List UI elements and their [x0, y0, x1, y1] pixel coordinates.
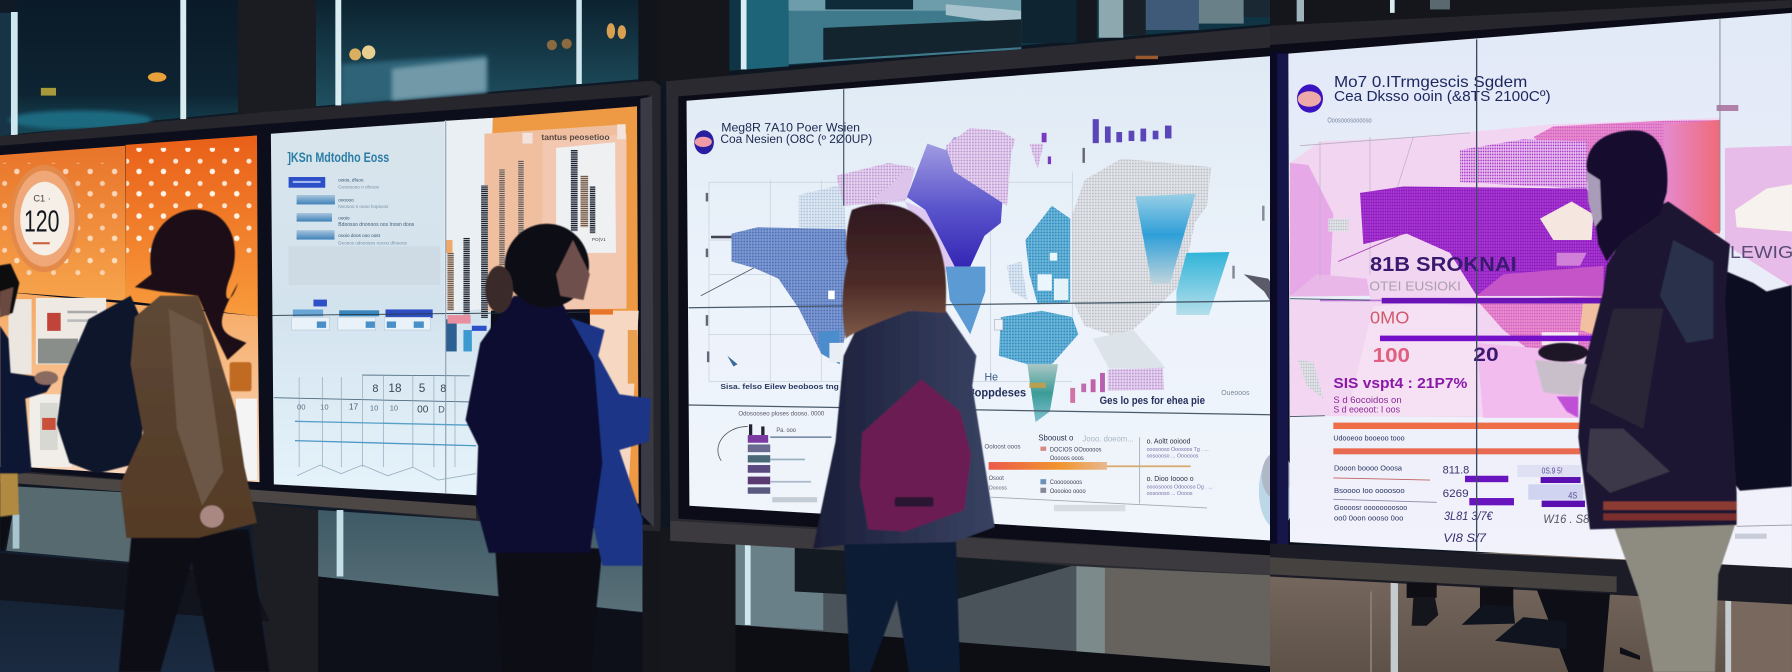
map: europe and africa: [995, 206, 1078, 422]
right section floor and top band: [1270, 0, 1792, 672]
navy coat: [466, 296, 602, 553]
grid: [701, 148, 1265, 381]
lower-right stats: DOCIOS OOooooos: [1050, 447, 1102, 453]
map captions: ᵗoppdeses: [972, 387, 1026, 400]
right edge map portion: LEWIG: [1730, 242, 1792, 262]
held tablet and hand: [1535, 360, 1587, 396]
lower-right stats: o. Aoltt ooiood: [1147, 437, 1191, 446]
map captions: Sisa. felso Eilew beoboos tng: [720, 382, 839, 391]
title: Ooosooosooooso: [1327, 117, 1372, 125]
map captions: He: [985, 371, 998, 384]
lower data table: VI8 S/7: [1443, 533, 1488, 546]
lower-right stats: [985, 433, 1213, 511]
lower data table: Dooon boooo Ooosa: [1334, 465, 1402, 473]
lower-right stats: oosoooso ... Oooos: [1147, 491, 1193, 497]
map captions: Ges lo pes for ehea pie: [1100, 396, 1205, 407]
key figures: OTEI EUSIOKI: [1369, 281, 1461, 294]
small column blocks and grid: [272, 120, 590, 493]
lower-right stats: Ooooss: [989, 485, 1007, 492]
key figures: S d 6ocoidos on: [1333, 395, 1402, 405]
lower-right stats: oooosooos Odoooso Dg . ...: [1147, 485, 1213, 491]
bar chart: pink columns and dots: [1070, 368, 1164, 403]
person: man with backpack on right: [1535, 130, 1792, 672]
bar chart: purple columns: [1093, 119, 1171, 143]
key figures: 81B SROKNAI: [1370, 252, 1517, 275]
blue jacket sleeve: [556, 313, 651, 566]
vertical hatched bars: PO(V1: [592, 237, 606, 242]
dot field: [0, 163, 122, 279]
lower-left data list: Pa. ooo: [776, 428, 796, 434]
jacket: [1578, 201, 1737, 529]
lower data table: 811.8: [1443, 465, 1469, 477]
person: woman with magenta backpack: [813, 204, 995, 672]
key figures: 0MO: [1370, 308, 1409, 328]
right edge map portion: [1717, 105, 1792, 287]
lower-right stats: oosoooso ... Oooooos: [1147, 454, 1199, 460]
lower-right stats: Coooooooos: [1050, 480, 1082, 486]
hair: [843, 204, 946, 339]
head: [1587, 130, 1667, 261]
map captions: [720, 371, 1250, 407]
icon: gauge dial with 120: C1 ·: [33, 193, 51, 203]
key figures: 100: [1373, 343, 1410, 367]
right display frame: [1270, 0, 1792, 604]
legs: [119, 529, 270, 672]
lower-left data list: [718, 411, 831, 502]
held phone: [230, 362, 252, 391]
lower data table: Goooosr oooooooosoo: [1334, 504, 1408, 512]
backpack: [57, 296, 152, 474]
small column blocks and grid: 10: [370, 404, 378, 413]
key figures: [1320, 252, 1603, 415]
legend list: Gonoeoeo n ofooos: [338, 185, 380, 190]
person: far left viewer: [0, 264, 58, 551]
map: americas: [727, 184, 852, 366]
small column blocks and grid: 17: [349, 401, 358, 411]
lower-right stats: Ooooioo oooo: [1050, 489, 1086, 495]
key figures: 20: [1473, 343, 1499, 365]
title: [720, 120, 873, 146]
legend list: Bdoosso dnonoos oos Inosn doos: [338, 222, 415, 228]
small column blocks and grid: 5: [419, 381, 426, 395]
coat: [813, 311, 995, 549]
panel: magenta map display: [1288, 13, 1792, 568]
lower data table: Bsoooo Ioo oooosoo: [1334, 487, 1405, 495]
globe shape: [1259, 452, 1296, 528]
heading: ]KSn Mdtodho Eoss: [287, 150, 389, 165]
jeans: [844, 536, 960, 672]
logo badge: [1297, 84, 1323, 113]
lower data table: 6269: [1443, 488, 1469, 501]
lower data table: oo0 0oon oooso 0oo: [1334, 515, 1404, 523]
left section architecture: windows, pillar and floor: [0, 0, 661, 672]
left display frame: [0, 81, 661, 531]
lower data table: Udooeoo booeoo tooo: [1333, 435, 1405, 443]
logo badge: [694, 130, 714, 154]
lower data table: W16 . S8: [1543, 513, 1589, 526]
middle display frame: [666, 24, 1300, 576]
dividers: [689, 89, 1277, 415]
head: [505, 224, 589, 308]
lower-left data list: Odosooseo ploses dooso. 0000: [738, 411, 825, 418]
vertical hatched bars: [446, 124, 626, 351]
map captions: Oueooos: [1221, 389, 1250, 397]
legend list: Neoooo s oooo hopsoos: [338, 204, 389, 209]
lower-right stats: Ooloost ooos: [985, 443, 1021, 450]
title: Coa Nesien (O8C (º 2Ø0UP): [720, 134, 873, 146]
legend list: ooios, dfuoo: [338, 178, 364, 183]
small column blocks and grid: D: [438, 404, 445, 414]
lower-right stats: o. Dioo Ioooo o: [1147, 475, 1194, 483]
map: pink and purple prism: [836, 128, 1051, 334]
middle section architecture: upper window and floor: [660, 0, 1300, 672]
east asia fragment: [1244, 274, 1276, 311]
map: pale ground: [1290, 118, 1720, 418]
magenta backpack: [860, 379, 971, 531]
lower-right stats: Osoot: [989, 476, 1004, 482]
lower data table: 0S.9 5!: [1542, 466, 1563, 476]
info cards: [8, 298, 257, 480]
title: Cea Dksso ooin (&8TS 2100Cº): [1334, 88, 1551, 104]
small column blocks and grid: 18: [388, 381, 402, 395]
lower data table: [1333, 423, 1792, 546]
legend list: oooio: [338, 215, 350, 220]
person: woman in brown coat with backpack: [57, 209, 270, 672]
icon: gauge dial with 120: [10, 165, 79, 272]
dividers: [1290, 19, 1720, 551]
lower-right stats: Sbooust o: [1038, 433, 1074, 443]
legs: [495, 544, 602, 672]
vertical hatched bars: tantus peosetioo: [541, 132, 610, 142]
map: grey region with blue trapezoids: [1072, 159, 1229, 369]
lower-right stats: Jooo. doeom...: [1082, 434, 1134, 444]
lower data table: 3L81 3/7€: [1444, 511, 1494, 523]
person: background feet: [1407, 583, 1640, 672]
key figures: S d eoeoot: I oos: [1333, 405, 1400, 415]
panel: orange gauge display: [0, 135, 260, 482]
small column blocks and grid: 00: [417, 404, 429, 415]
panel: world map display: [687, 56, 1296, 541]
title: Mo7 0.ITrmgescis Sgdem: [1334, 72, 1527, 90]
title: Meg8R 7A10 Poer Wsien: [721, 120, 860, 135]
icon: gauge dial with 120: 120: [24, 204, 59, 239]
legend list: oooio doos ooo oost: [338, 233, 381, 238]
small column blocks and grid: 8: [372, 383, 379, 395]
small column blocks and grid: 00: [297, 402, 305, 411]
hair: [135, 209, 246, 360]
title: [1327, 72, 1551, 125]
map: magenta landmass: [1338, 120, 1720, 345]
legend list: oooooo: [338, 197, 354, 202]
panel: blue and orange bar chart display: [271, 106, 639, 504]
sleeve stripes: [1603, 501, 1737, 520]
pants: [1613, 525, 1735, 672]
lower-right stats: ooosooso Ooosoos Tg . ...: [1147, 447, 1209, 453]
person: woman in navy and blue jacket: [466, 224, 651, 672]
lower data table: 4S: [1568, 490, 1578, 501]
dot field upper: [126, 148, 255, 255]
backpack: [1700, 266, 1792, 491]
small column blocks and grid: 8: [440, 383, 446, 395]
lower-right stats: Ooooos ooos: [1050, 456, 1084, 462]
small column blocks and grid: 10: [390, 404, 398, 413]
legend list: Deosos odooosso oocoo dfoooos: [338, 240, 407, 245]
small column blocks and grid: 10: [320, 402, 329, 411]
key figures: SIS vspt4 : 21P7%: [1333, 374, 1468, 391]
legend list: [289, 177, 440, 285]
coat: [120, 296, 257, 538]
